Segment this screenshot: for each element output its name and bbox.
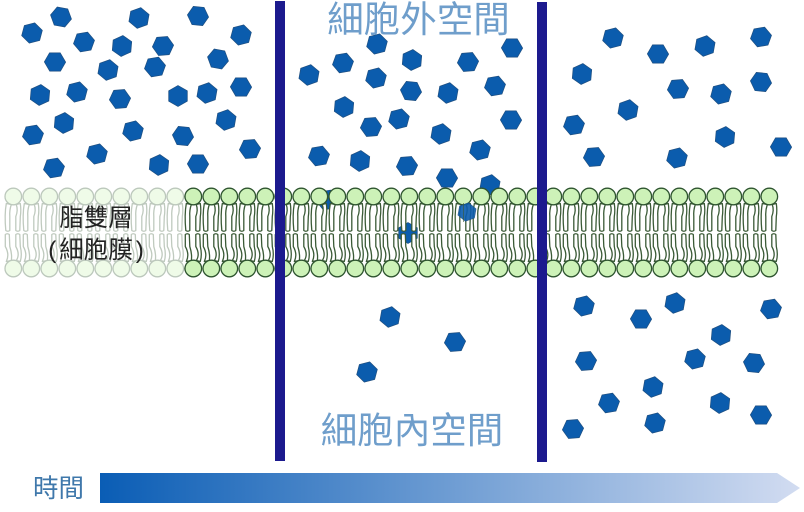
lipid bilayer membrane — [0, 185, 778, 280]
label: time: 時間 — [33, 475, 84, 503]
molecules: second stage, intracellular — [355, 305, 468, 385]
time divider: left bar — [275, 1, 285, 461]
molecule inside the upper leaflet — [457, 201, 477, 223]
molecules: third stage, outside — [562, 24, 794, 171]
arrow: time — [100, 473, 800, 503]
molecules: extracellular, first stage — [20, 2, 263, 181]
molecule crossing the membrane, behind the lipid tails — [399, 222, 417, 244]
label: cell membrane: (細胞膜) — [48, 236, 144, 264]
time divider: right bar — [537, 2, 547, 462]
label: lipid bilayer: 脂雙層 — [59, 204, 133, 232]
molecules: second stage, outside and entering membrane — [298, 31, 525, 213]
molecules: third stage, intracellular — [560, 291, 783, 442]
heading: extracellular space: 細胞外空間 — [327, 0, 510, 40]
heading: intracellular space: 細胞內空間 — [321, 410, 503, 451]
